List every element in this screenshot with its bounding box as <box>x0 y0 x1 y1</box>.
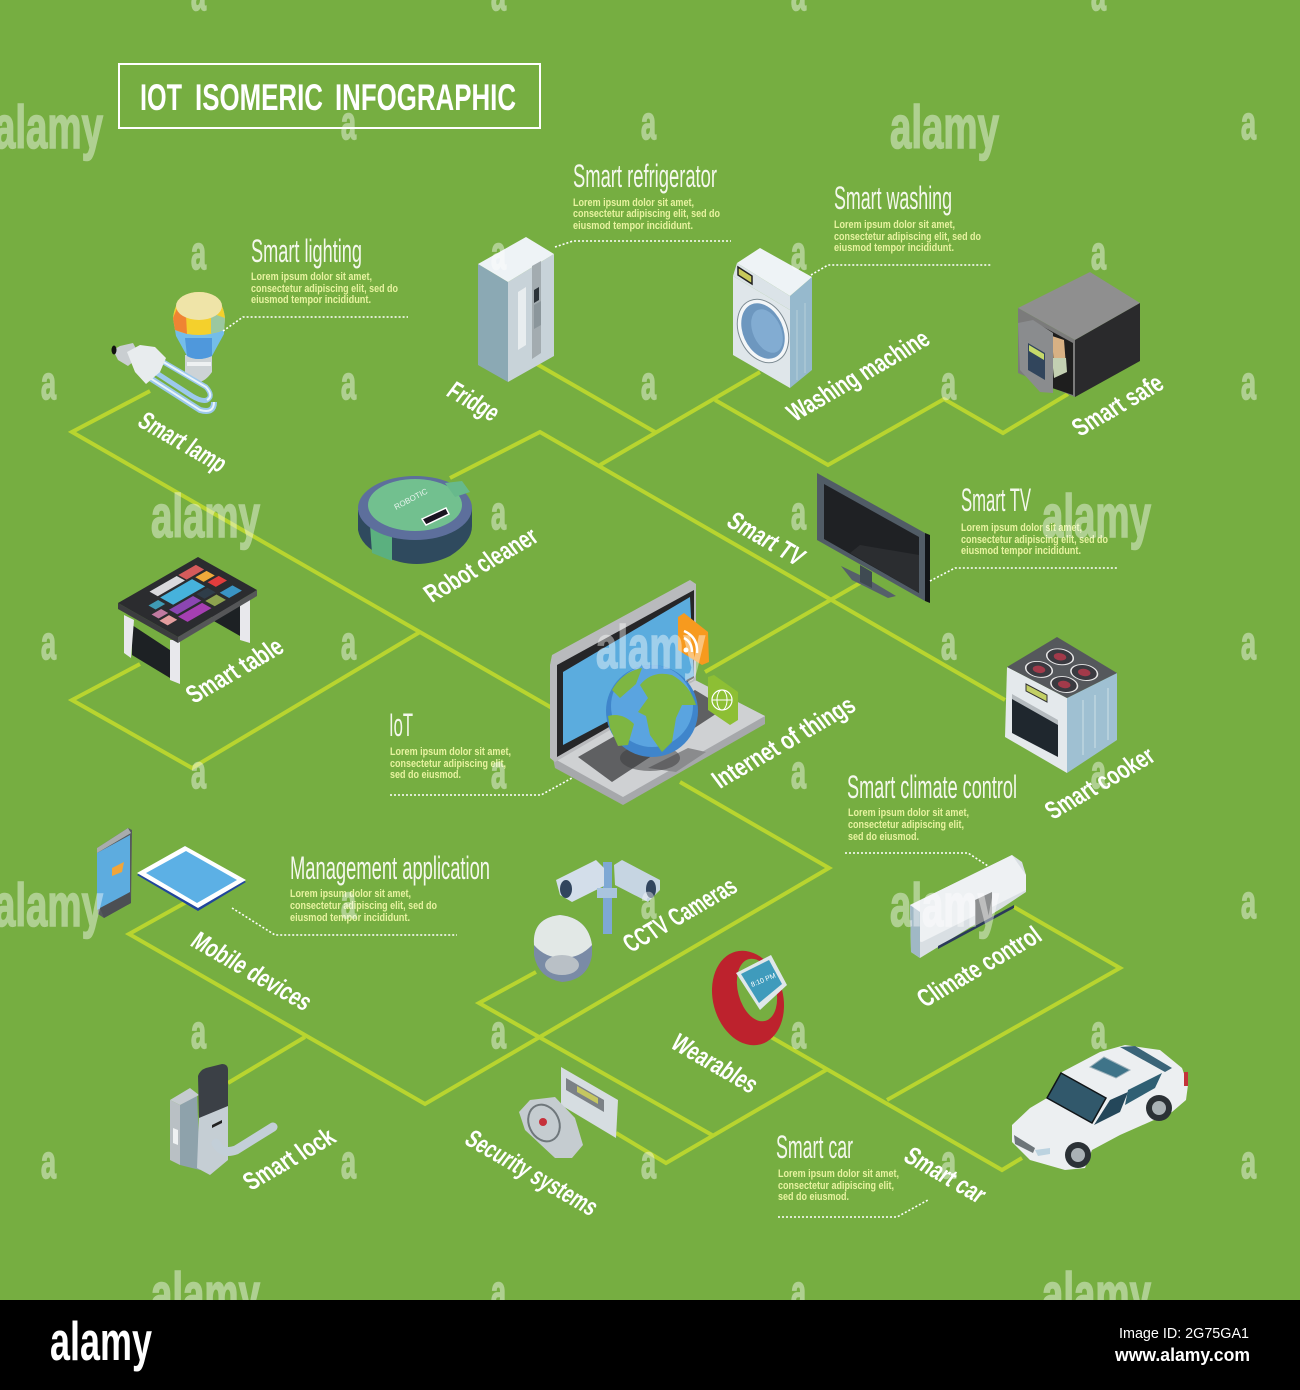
watermark pattern: a <box>791 745 806 798</box>
heading: iot: Lorem ipsum dolor sit amet, <box>390 746 511 758</box>
label: smart lamp: Smart lamp <box>132 406 234 478</box>
heading: smart car: Lorem ipsum dolor sit amet, <box>778 1168 899 1180</box>
watermark pattern: a <box>641 356 656 409</box>
watermark pattern: a <box>341 616 356 669</box>
watermark pattern: a <box>491 1265 506 1318</box>
heading: smart lighting: Lorem ipsum dolor sit amet, <box>251 271 372 283</box>
watermark pattern: a <box>791 1005 806 1058</box>
footer bar: www.alamy.com <box>1114 1345 1250 1365</box>
heading: management application: eiusmod tempor incididunt. <box>290 912 410 924</box>
watermark pattern: a <box>641 1135 656 1188</box>
label: internet of things: Internet of things <box>706 690 861 794</box>
icon: fridge <box>478 237 554 382</box>
heading: management application: Management application <box>290 850 490 886</box>
icon: smart lock <box>170 1064 273 1175</box>
watermark pattern: alamy <box>151 1261 260 1328</box>
heading: smart climate control: sed do eiusmod. <box>848 831 919 843</box>
watermark pattern: a <box>791 486 806 539</box>
label: cctv cameras: CCTV Cameras <box>617 871 743 958</box>
heading: smart refrigerator: consectetur adipiscing elit, sed do <box>573 208 720 220</box>
watermark pattern: a <box>941 356 956 409</box>
heading: smart climate control: Smart climate control <box>847 769 1017 805</box>
watermark pattern: alamy <box>890 872 999 939</box>
label: climate control: Climate control <box>911 920 1047 1013</box>
heading: smart lighting: Smart lighting <box>251 233 362 269</box>
title <box>119 64 540 128</box>
heading: smart washing: Smart washing <box>834 180 952 216</box>
heading: smart lighting <box>223 233 408 331</box>
icon: smart lighting bulbs <box>112 292 225 411</box>
watermark pattern: alamy <box>890 94 999 161</box>
heading: iot: consectetur adipiscing elit, <box>390 758 506 770</box>
connector lines network <box>72 363 1120 1170</box>
label: security systems: Security systems <box>459 1124 605 1221</box>
heading: smart climate control <box>845 769 1017 866</box>
heading: management application: consectetur adipiscing elit, sed do <box>290 900 437 912</box>
label: mobile devices: Mobile devices <box>185 926 319 1016</box>
icon: air conditioner <box>910 855 1026 958</box>
watermark pattern: a <box>1091 1005 1106 1058</box>
watermark pattern: a <box>1091 226 1106 279</box>
title: INFOGRAPHIC <box>335 77 516 118</box>
icon: laptop with globe <box>550 580 765 805</box>
label: smart lock: Smart lock <box>237 1122 342 1196</box>
watermark pattern: a <box>191 1005 206 1058</box>
heading: smart tv: Smart TV <box>961 482 1031 518</box>
title: ISOMERIC <box>195 77 323 118</box>
label: fridge: Fridge <box>441 376 506 427</box>
watermark pattern: a <box>41 616 56 669</box>
heading: smart car: sed do eiusmod. <box>778 1191 849 1203</box>
icon: smart tv <box>817 473 930 603</box>
watermark pattern: a <box>1241 1135 1256 1188</box>
heading: smart car: consectetur adipiscing elit, <box>778 1180 894 1192</box>
watermark pattern: a <box>941 1135 956 1188</box>
label: smart table: Smart table <box>180 632 289 709</box>
heading: smart tv: consectetur adipiscing elit, sed do <box>961 534 1108 546</box>
watermark pattern: a <box>491 745 506 798</box>
heading: smart tv <box>930 482 1118 581</box>
heading: iot: IoT <box>389 707 413 743</box>
heading: smart refrigerator: eiusmod tempor incididunt. <box>573 220 693 232</box>
heading: smart washing: eiusmod tempor incididunt. <box>834 242 954 254</box>
footer bar: alamy <box>50 1310 152 1372</box>
watermark pattern: a <box>1241 875 1256 928</box>
icon: smart watch <box>702 943 794 1053</box>
watermark pattern: a <box>1241 96 1256 149</box>
heading: smart washing <box>811 180 992 275</box>
watermark pattern: a <box>41 1135 56 1188</box>
label: smart car: Smart car <box>898 1141 993 1209</box>
heading: management application: Lorem ipsum dolor sit amet, <box>290 888 411 900</box>
watermark pattern: a <box>191 745 206 798</box>
watermark pattern: alamy <box>1042 1261 1151 1328</box>
watermark pattern: a <box>641 96 656 149</box>
icon: smart car <box>1012 1045 1188 1170</box>
watermark pattern: alamy <box>151 483 260 550</box>
watermark pattern: a <box>791 226 806 279</box>
heading: smart washing: consectetur adipiscing elit, sed do <box>834 231 981 243</box>
label: smart cooker: Smart cooker <box>1039 741 1161 825</box>
watermark pattern: a <box>341 875 356 928</box>
heading: smart refrigerator: Lorem ipsum dolor sit amet, <box>573 197 694 209</box>
heading: smart tv: eiusmod tempor incididunt. <box>961 545 1081 557</box>
icon: robot cleaner <box>358 476 472 564</box>
icon: smart safe <box>1018 272 1140 397</box>
footer bar <box>0 1300 1300 1390</box>
icon: security systems <box>519 1067 618 1158</box>
icon: smart watch: 8:10 PM <box>750 973 777 989</box>
watermark pattern: a <box>791 1265 806 1318</box>
watermark pattern: alamy <box>596 614 705 681</box>
label: wearables: Wearables <box>665 1028 765 1099</box>
heading: iot <box>389 707 572 795</box>
watermark pattern: a <box>41 356 56 409</box>
watermark pattern: a <box>341 1135 356 1188</box>
heading: smart refrigerator: Smart refrigerator <box>573 158 717 194</box>
icon: smart table <box>118 557 257 684</box>
icon: robot cleaner: ROBOTIC <box>393 487 429 512</box>
heading: smart car: Smart car <box>776 1129 853 1165</box>
label: washing machine: Washing machine <box>781 324 935 427</box>
watermark pattern: a <box>491 1005 506 1058</box>
watermark pattern: a <box>941 616 956 669</box>
footer bar: Image ID: 2G75GA1 <box>1119 1325 1249 1342</box>
title: IOT <box>140 77 182 118</box>
heading: iot: sed do eiusmod. <box>390 769 461 781</box>
heading: smart car <box>776 1129 928 1217</box>
icon: cctv cameras <box>534 860 660 982</box>
heading: smart climate control: Lorem ipsum dolor sit amet, <box>848 807 969 819</box>
heading: smart washing: Lorem ipsum dolor sit amet, <box>834 219 955 231</box>
watermark pattern: a <box>491 226 506 279</box>
watermark pattern: a <box>341 96 356 149</box>
watermark pattern: a <box>191 226 206 279</box>
label: smart tv: Smart TV <box>721 506 812 572</box>
watermark pattern: a <box>1091 745 1106 798</box>
icon: washing machine <box>728 248 812 388</box>
heading: smart tv: Lorem ipsum dolor sit amet, <box>961 522 1082 534</box>
label: smart safe: Smart safe <box>1066 368 1169 442</box>
watermark pattern: alamy <box>1042 483 1151 550</box>
watermark pattern: a <box>1241 616 1256 669</box>
icon: mobile devices <box>97 828 246 918</box>
heading: smart lighting: eiusmod tempor incididunt. <box>251 294 371 306</box>
heading: smart lighting: consectetur adipiscing elit, sed do <box>251 283 398 295</box>
watermark pattern: a <box>641 875 656 928</box>
label: robot cleaner: Robot cleaner <box>418 521 544 608</box>
watermark pattern: a <box>341 356 356 409</box>
watermark pattern: a <box>491 486 506 539</box>
heading: management application <box>232 850 490 935</box>
watermark pattern: a <box>1241 356 1256 409</box>
icon: smart cooker <box>1005 637 1117 773</box>
heading: smart refrigerator <box>555 158 731 247</box>
heading: smart climate control: consectetur adipiscing elit, <box>848 819 964 831</box>
